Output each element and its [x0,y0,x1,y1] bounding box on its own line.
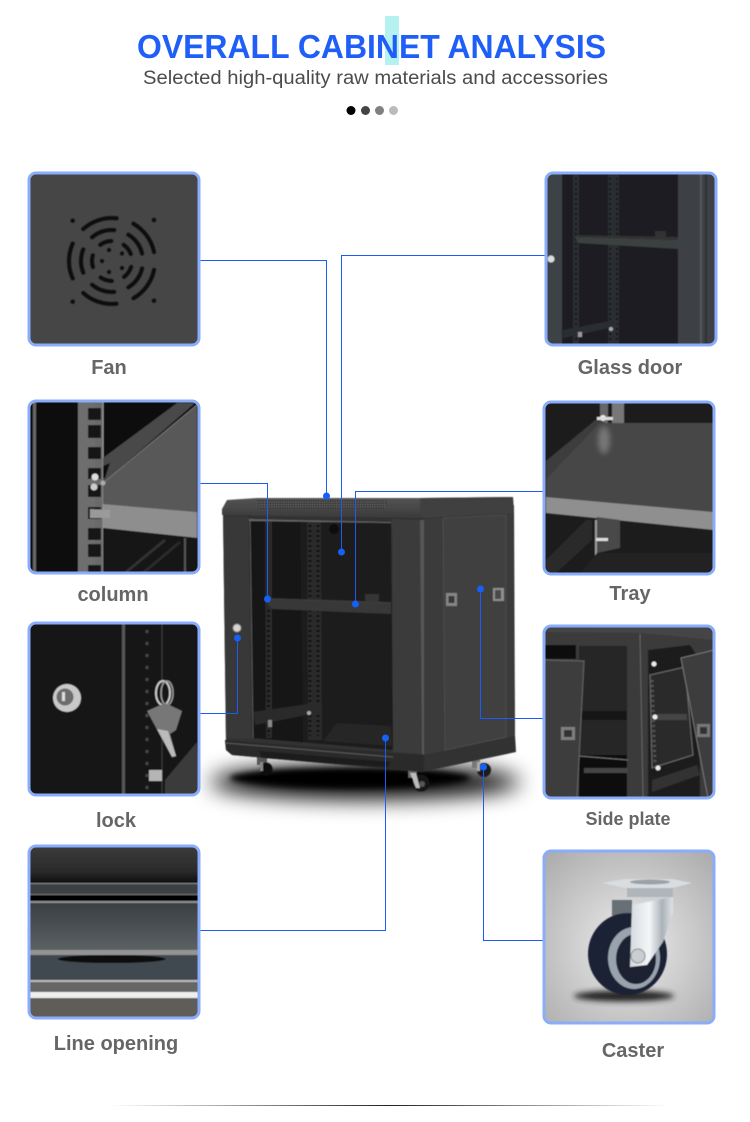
subtitle: Selected high-quality raw materials and accessories [143,68,608,89]
label: fan: Fan [91,357,127,379]
label: glass door: Glass door [578,357,682,379]
connector lines [199,256,546,940]
shelf [265,598,391,605]
panel: lock [29,623,199,795]
side wall [424,513,515,755]
label: side plate: Side plate [585,809,671,829]
pagination dots [346,106,398,115]
body backing [223,505,515,762]
line: tray [356,492,544,604]
casters [257,755,491,792]
glass [249,519,393,750]
panel: glass door [546,173,716,345]
line: lock [199,638,238,714]
top cap [222,497,514,518]
door lock [233,624,241,632]
panel: column [29,401,199,573]
connector dots [234,492,487,770]
label: caster: Caster [602,1040,664,1062]
side panel [443,515,506,750]
icon: caster wheel [574,879,692,1002]
title: OVERALL CABINET ANALYSIS [137,28,606,65]
line: fan [199,260,326,496]
panel: fan [29,173,199,345]
icon: keys [147,681,182,757]
label: column: column [77,584,149,606]
line: column [199,484,268,599]
line: glass door [342,256,546,552]
footer line [110,1105,670,1106]
panel: caster [544,851,714,1023]
label: tray: Tray [609,583,651,605]
icon: lock cylinder [53,684,81,712]
label: lock: lock [96,810,137,832]
floor shadow [210,765,520,799]
cabinet illustration [222,497,516,792]
line: side plate [480,589,544,718]
door [223,516,424,755]
label: line opening: Line opening [54,1033,178,1055]
fan shadow and bracket [329,524,339,534]
panel: line opening [29,846,199,1018]
icon: fan grille [66,216,157,306]
title highlight block [385,16,399,65]
rack posts [265,520,322,740]
base [225,735,516,772]
side handles [446,588,504,606]
line: line opening [199,738,386,930]
line: caster [484,767,544,940]
header [137,16,608,115]
panel: tray [544,402,714,574]
panel: side plate [544,626,714,798]
